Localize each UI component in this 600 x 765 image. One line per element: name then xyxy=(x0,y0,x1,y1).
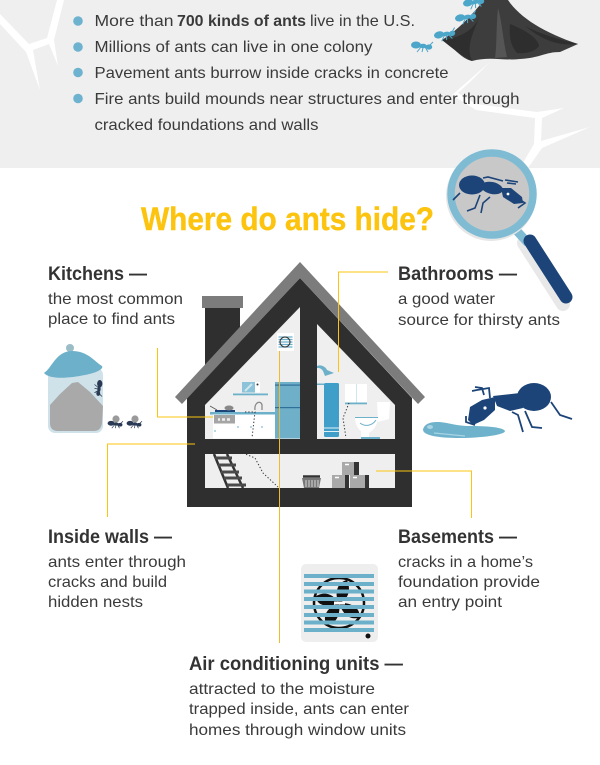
description line 2: place to find ants xyxy=(48,311,175,328)
house illustration xyxy=(175,262,425,507)
description line 2: source for thirsty ants xyxy=(398,312,560,329)
label: basements xyxy=(398,527,540,611)
small air conditioning unit xyxy=(277,333,294,351)
kitchen shelf and microwave xyxy=(233,382,268,395)
heading: Air conditioning units — xyxy=(189,654,403,675)
connector: basements xyxy=(376,471,472,518)
cracks: left xyxy=(0,0,64,90)
fact list xyxy=(73,13,519,134)
ant on the ground xyxy=(411,42,433,52)
description: cracks in a home’s xyxy=(398,554,533,571)
storage boxes xyxy=(332,462,369,488)
ant trails xyxy=(243,403,349,487)
refrigerator xyxy=(275,382,300,438)
title: Where do ants hide? xyxy=(141,201,434,237)
bullet 1 xyxy=(73,16,83,26)
panel: ant facts background xyxy=(0,0,600,168)
icon: ant with crumb 2 xyxy=(127,415,142,428)
icon: air conditioning unit xyxy=(301,564,378,642)
bullet 4 xyxy=(73,94,83,103)
icon: puddle xyxy=(423,422,505,438)
fact 1: live in the U.S. xyxy=(310,13,415,30)
roof xyxy=(175,262,425,404)
description line 3: homes through window units xyxy=(189,722,406,739)
house body xyxy=(187,278,412,507)
bathroom cabinet xyxy=(345,384,367,404)
label: kitchens xyxy=(48,264,183,328)
fact 1: 700 kinds of ants xyxy=(177,13,306,30)
connector: bathrooms xyxy=(338,272,388,372)
cracks: right xyxy=(452,62,590,168)
kitchen cabinets xyxy=(210,402,275,438)
heading: Kitchens — xyxy=(48,264,147,285)
ant mound xyxy=(442,0,578,61)
description line 2: foundation provide xyxy=(398,574,540,591)
chimney cap xyxy=(202,296,243,308)
bullet 3 xyxy=(73,68,83,77)
icon: magnifying glass with ant xyxy=(446,151,566,304)
fact 1 xyxy=(94,13,415,30)
description line 3: hidden nests xyxy=(48,594,143,611)
label: bathrooms xyxy=(398,264,560,329)
room: kitchen and attic xyxy=(205,307,300,439)
heading: Basements — xyxy=(398,527,517,548)
ant on mound top xyxy=(462,0,486,11)
description line 3: an entry point xyxy=(398,594,503,611)
ant on mound middle xyxy=(454,10,478,26)
fact 4 continued: cracked foundations and walls xyxy=(94,117,318,134)
label: air conditioning units xyxy=(189,654,410,739)
connector: inside walls xyxy=(108,444,195,517)
bullet 2 xyxy=(73,42,83,52)
description line 2: trapped inside, ants can enter xyxy=(189,701,410,718)
heading: Inside walls — xyxy=(48,527,172,548)
description: ants enter through xyxy=(48,554,186,571)
room: bathroom xyxy=(317,324,395,439)
label: inside walls xyxy=(48,527,186,611)
fact 2: Millions of ants can live in one colony xyxy=(94,39,372,56)
fact 3: Pavement ants burrow inside cracks in concrete xyxy=(94,65,449,82)
description: a good water xyxy=(398,291,496,308)
icon: ant with crumb 1 xyxy=(108,415,123,428)
room: basement xyxy=(205,454,395,488)
shower head xyxy=(317,365,334,376)
chimney xyxy=(205,305,240,375)
fact 1: More than xyxy=(94,13,174,30)
toilet xyxy=(355,402,390,439)
icon: large blue ant xyxy=(466,383,572,432)
laundry basket xyxy=(302,476,321,488)
description: attracted to the moisture xyxy=(189,681,375,698)
shower curtain xyxy=(317,383,339,437)
icon: cookie jar xyxy=(44,344,103,433)
fact 4: Fire ants build mounds near structures and enter through xyxy=(94,91,520,108)
description line 2: cracks and build xyxy=(48,574,167,591)
connector: kitchens xyxy=(158,348,213,417)
basement ladder xyxy=(214,454,246,488)
ant on mound lower xyxy=(433,27,457,43)
heading: Bathrooms — xyxy=(398,264,517,285)
connector: air conditioning xyxy=(278,351,280,643)
description: the most common xyxy=(48,291,183,308)
